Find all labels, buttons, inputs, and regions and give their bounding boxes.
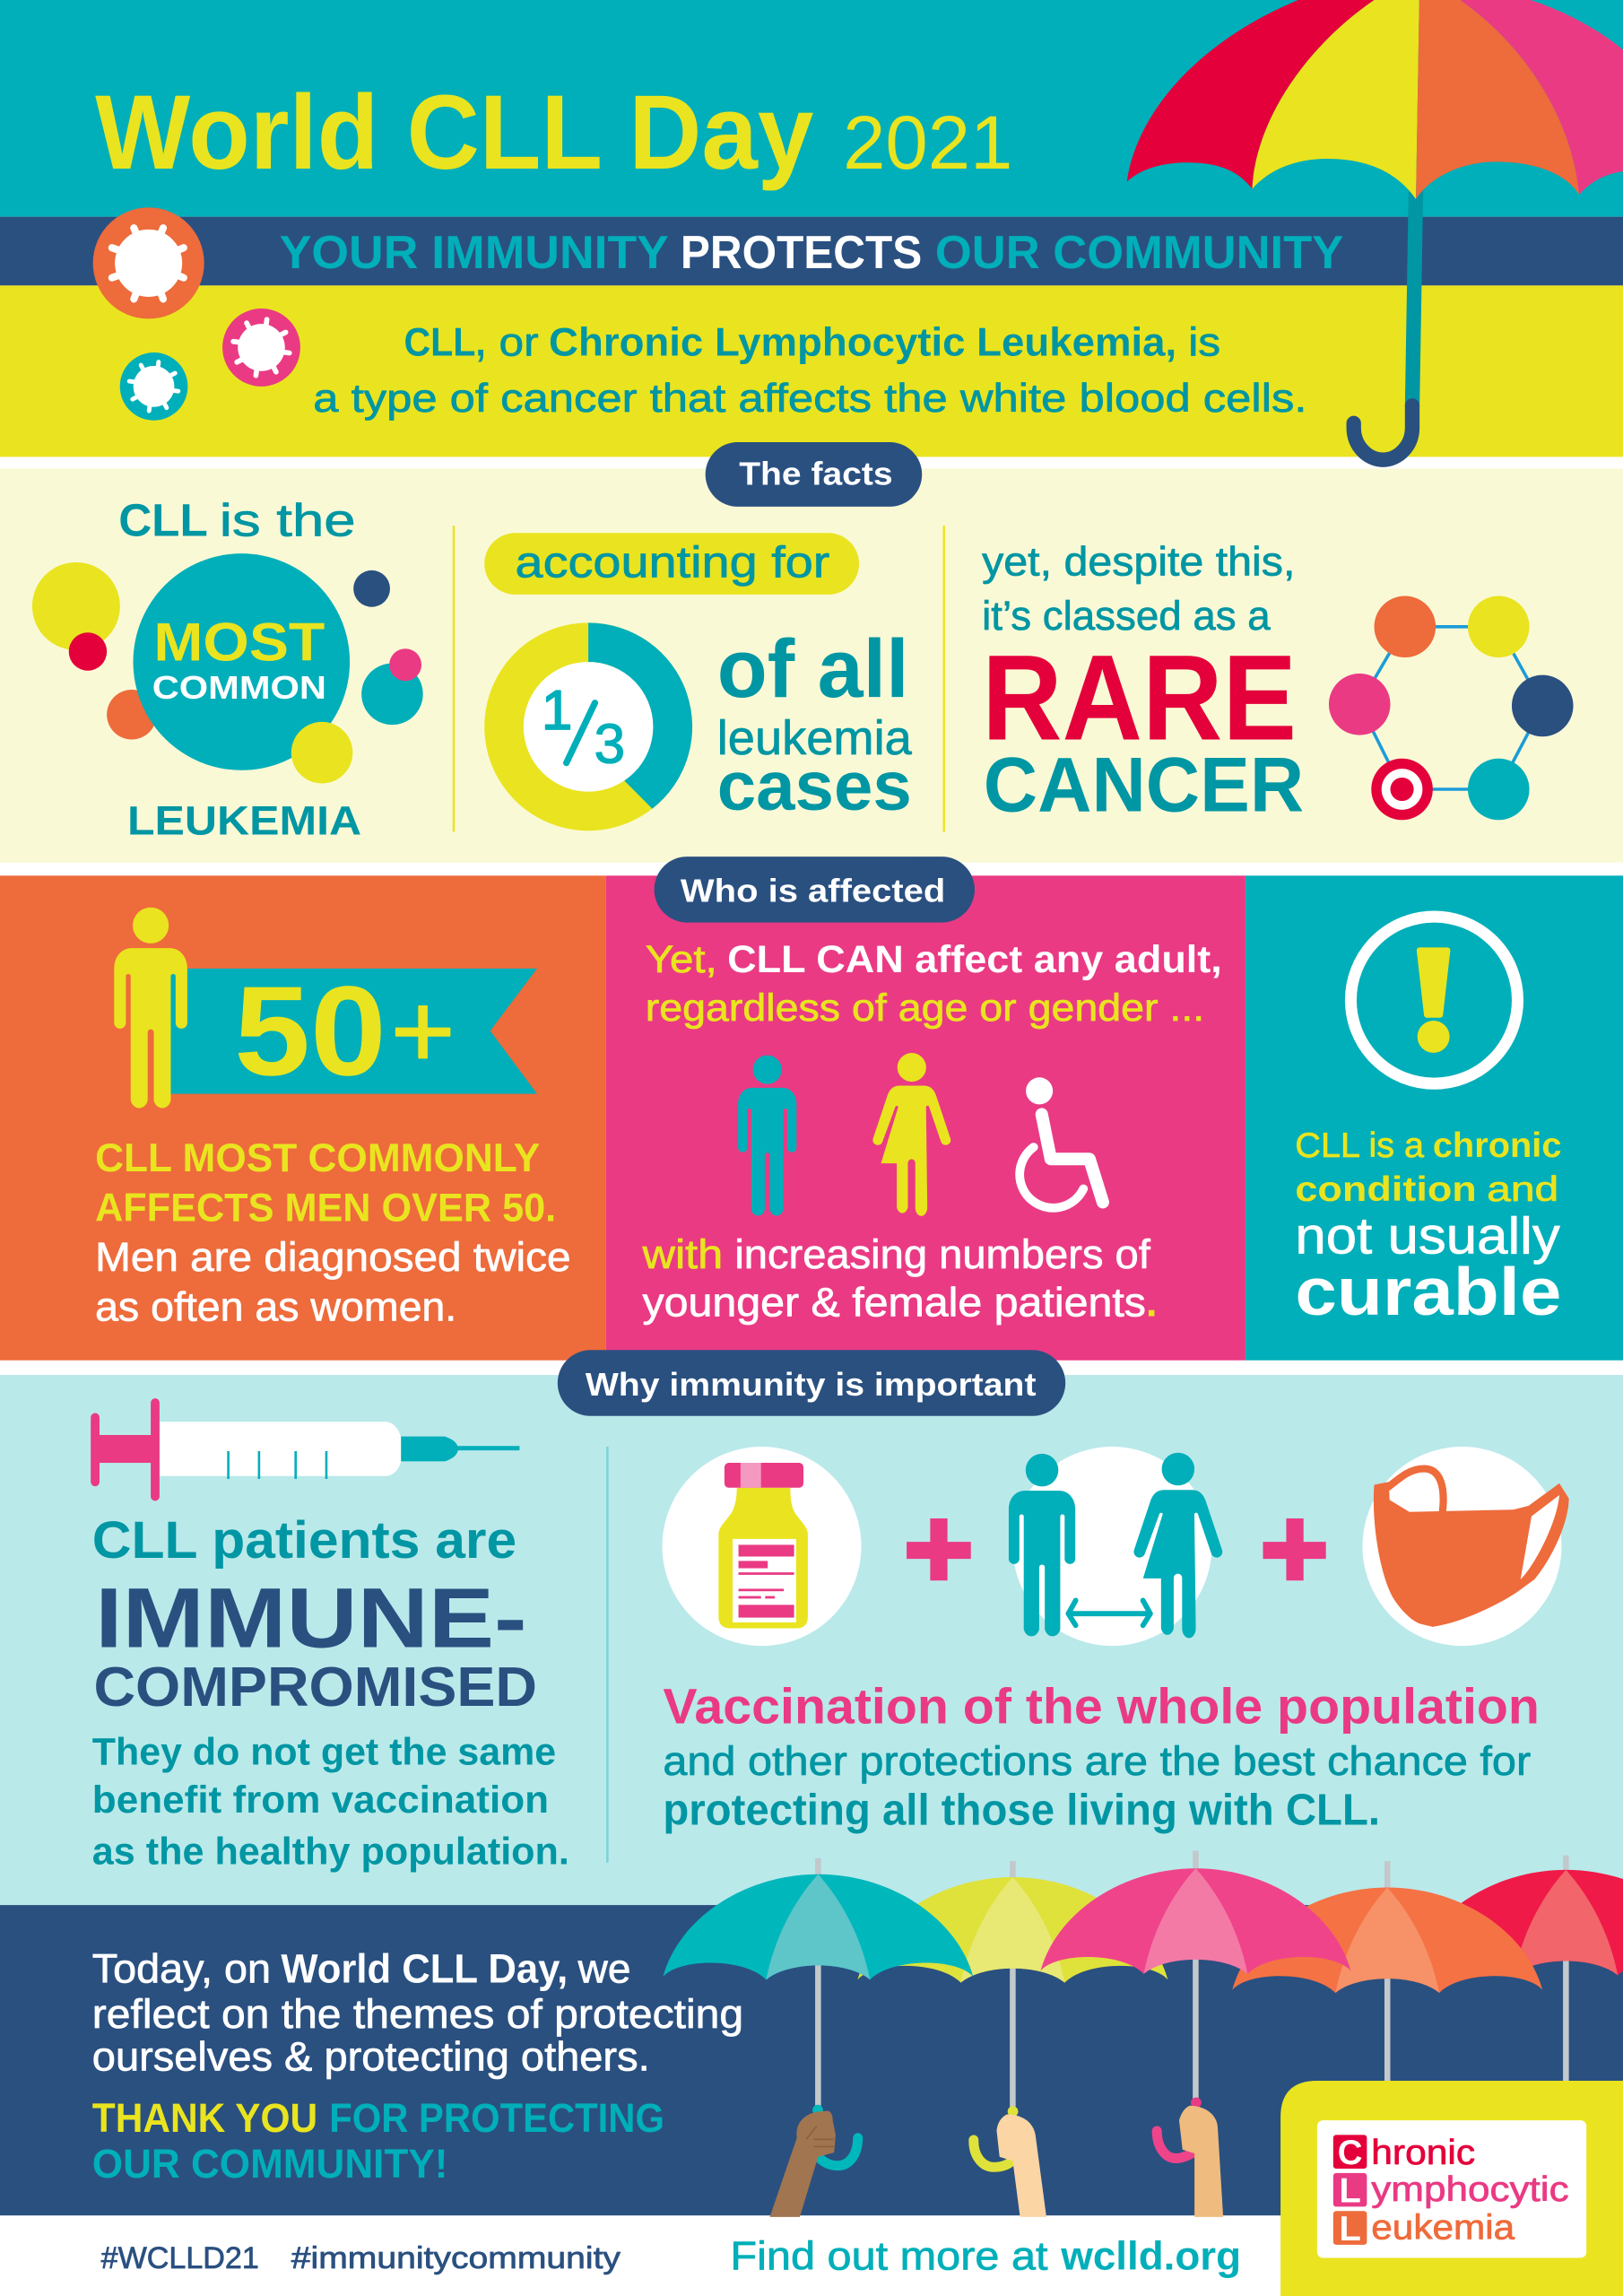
panel: orange men over 50	[0, 875, 606, 1361]
icon: molecule network	[1329, 596, 1574, 820]
panel: teal chronic condition: chronic	[1433, 1126, 1561, 1165]
panel: pink any adult: regardless of age or gender ...	[646, 987, 1204, 1029]
footer: hashtags	[101, 2241, 621, 2275]
intro text: Chronic Lymphocytic Leukemia,	[549, 321, 1176, 365]
text: closing message	[92, 1946, 743, 2187]
panel: immunity background	[0, 1375, 1623, 1905]
panel: pink any adult: younger & female patients	[642, 1280, 1146, 1326]
panel: teal chronic condition: curable	[1295, 1254, 1561, 1329]
panel: teal chronic condition: condition	[1295, 1170, 1477, 1209]
icon: vaccine vial	[663, 1447, 861, 1646]
logo: CLL: L	[1339, 2210, 1361, 2248]
panel: header background	[0, 0, 1623, 457]
heading pill: the facts: The facts	[739, 455, 893, 491]
title: 2021	[843, 100, 1012, 185]
logo: CLL: eukemia	[1371, 2208, 1515, 2247]
logo: CLL: L	[1339, 2172, 1361, 2211]
text: immune-compromised: as the healthy population.	[92, 1830, 569, 1872]
footer: hashtags: #WCLLD21	[101, 2241, 259, 2275]
text: closing message: reflect on the themes of protecting	[92, 1991, 743, 2037]
text: rare cancer: it’s classed as a	[982, 593, 1271, 639]
icon: orange virus	[93, 207, 204, 318]
panel: teal chronic condition: and	[1487, 1170, 1558, 1209]
icon: syringe	[91, 1398, 519, 1500]
text: immune-compromised: They do not get the same	[92, 1730, 556, 1772]
icon: most common bubbles: MOST	[153, 611, 325, 672]
text: closing message: THANK YOU	[92, 2095, 317, 2141]
panel: orange men over 50: as often as women.	[95, 1284, 456, 1330]
text: of all leukemia cases: of all	[717, 623, 909, 715]
panel: facts background	[0, 468, 1623, 863]
icon: teal virus	[115, 347, 193, 426]
umbrella: yellow	[857, 1861, 1167, 2107]
text: vaccination message: and other protections are the best chance for	[663, 1738, 1531, 1784]
text: closing message: OUR COMMUNITY!	[92, 2141, 447, 2187]
slogan: YOUR IMMUNITY	[280, 227, 669, 279]
panel: orange men over 50: +	[391, 972, 456, 1090]
umbrella: teal	[663, 1858, 973, 2106]
panel: pink any adult: Yet,	[646, 938, 717, 980]
footer: website	[730, 2235, 1241, 2279]
panel: pink any adult	[606, 875, 1245, 1361]
text: vaccination message: protecting all those living with CLL.	[663, 1786, 1380, 1834]
icon: plus	[907, 1518, 971, 1580]
text: rare cancer: CANCER	[984, 742, 1304, 828]
text: closing message: we	[577, 1946, 630, 1992]
text: immune-compromised: CLL patients are	[92, 1511, 516, 1570]
chart: one third donut: 1	[542, 680, 572, 742]
umbrella: pink	[1040, 1851, 1350, 2100]
text: vaccination message: Vaccination of the whole population	[663, 1679, 1540, 1735]
panel: orange men over 50: CLL MOST COMMONLY	[95, 1136, 540, 1180]
umbrella: orange	[1232, 1861, 1542, 2085]
text: closing message: World CLL Day,	[281, 1946, 568, 1992]
intro text: is	[1188, 321, 1220, 365]
panel: orange men over 50: 50	[234, 960, 386, 1102]
text: of all leukemia cases: leukemia	[717, 711, 912, 765]
icon: most common bubbles: COMMON	[152, 669, 326, 706]
logo: CLL	[1280, 2081, 1623, 2296]
panel: pink any adult: with	[641, 1231, 723, 1277]
panel: orange men over 50: Men are diagnosed twice	[95, 1234, 571, 1280]
intro text: a type of cancer that affects the white blood cells.	[313, 377, 1306, 421]
text: leukemia: LEUKEMIA	[127, 798, 361, 844]
intro text	[313, 321, 1306, 421]
intro text: or	[499, 321, 539, 365]
text: vaccination message	[663, 1679, 1540, 1834]
panel: teal chronic condition	[1245, 875, 1623, 1361]
heading pill: who is affected: Who is affected	[681, 873, 945, 909]
slogan	[280, 227, 1343, 279]
icon: hand brown	[769, 2105, 858, 2217]
panel: pink any adult: increasing numbers of	[734, 1231, 1150, 1277]
text: of all leukemia cases: cases	[717, 749, 912, 825]
text: CLL is the	[118, 495, 356, 546]
intro text: CLL,	[404, 321, 486, 365]
text: CLL is the: CLL	[118, 495, 208, 546]
panel: orange men over 50: AFFECTS MEN OVER 50.	[95, 1187, 556, 1231]
panel: pink any adult: CLL CAN affect any adult,	[727, 938, 1222, 980]
icon: hand tan	[1157, 2098, 1223, 2217]
text: of all leukemia cases	[717, 623, 912, 825]
text: CLL is the: is the	[220, 495, 356, 546]
pill: accounting for	[484, 533, 859, 595]
text: immune-compromised: benefit from vaccination	[92, 1779, 549, 1821]
text: closing message: ourselves & protecting others.	[92, 2034, 650, 2080]
heading pill: who is affected	[655, 857, 975, 923]
panel: bottom navy	[0, 1905, 1623, 2215]
text: immune-compromised: IMMUNE-	[95, 1571, 527, 1666]
text: immune-compromised	[92, 1511, 569, 1872]
title: World CLL Day	[95, 74, 813, 191]
icon: pink virus	[216, 302, 307, 393]
logo: CLL: C	[1338, 2134, 1362, 2172]
slogan: PROTECTS	[681, 227, 922, 279]
text: closing message: Today, on	[92, 1946, 271, 1992]
umbrella: red	[1410, 1856, 1623, 2090]
text: rare cancer: RARE	[982, 629, 1297, 765]
panel: pink any adult: .	[1146, 1280, 1158, 1326]
chart: one third donut	[484, 622, 692, 831]
panel: teal chronic condition: not usually	[1295, 1208, 1560, 1265]
pill: accounting for: accounting for	[515, 538, 829, 587]
text: rare cancer: yet, despite this,	[982, 539, 1295, 585]
icon: social distancing people	[1009, 1447, 1222, 1646]
footer: website: wclld.org	[1060, 2235, 1241, 2279]
icon: face mask	[1362, 1447, 1569, 1646]
icon: most common bubbles	[32, 553, 423, 783]
footer: hashtags: #immunitycommunity	[291, 2241, 621, 2275]
icon: plus	[1263, 1518, 1326, 1580]
logo: CLL: hronic	[1371, 2134, 1475, 2172]
icon: hand light	[974, 2106, 1046, 2217]
heading pill: why immunity is important	[558, 1350, 1065, 1416]
icon: main umbrella	[1127, 0, 1623, 460]
slogan: OUR COMMUNITY	[935, 227, 1343, 279]
footer: website: Find out more at	[730, 2235, 1048, 2279]
text: rare cancer	[982, 539, 1304, 828]
text: closing message: FOR PROTECTING	[329, 2095, 664, 2141]
text: immune-compromised: COMPROMISED	[93, 1657, 537, 1718]
panel: teal chronic condition: CLL is a	[1295, 1126, 1424, 1165]
heading pill: the facts	[706, 442, 922, 507]
chart: one third donut: 3	[595, 714, 625, 776]
heading pill: why immunity is important: Why immunity is important	[586, 1366, 1037, 1403]
logo: CLL: ymphocytic	[1371, 2170, 1569, 2209]
